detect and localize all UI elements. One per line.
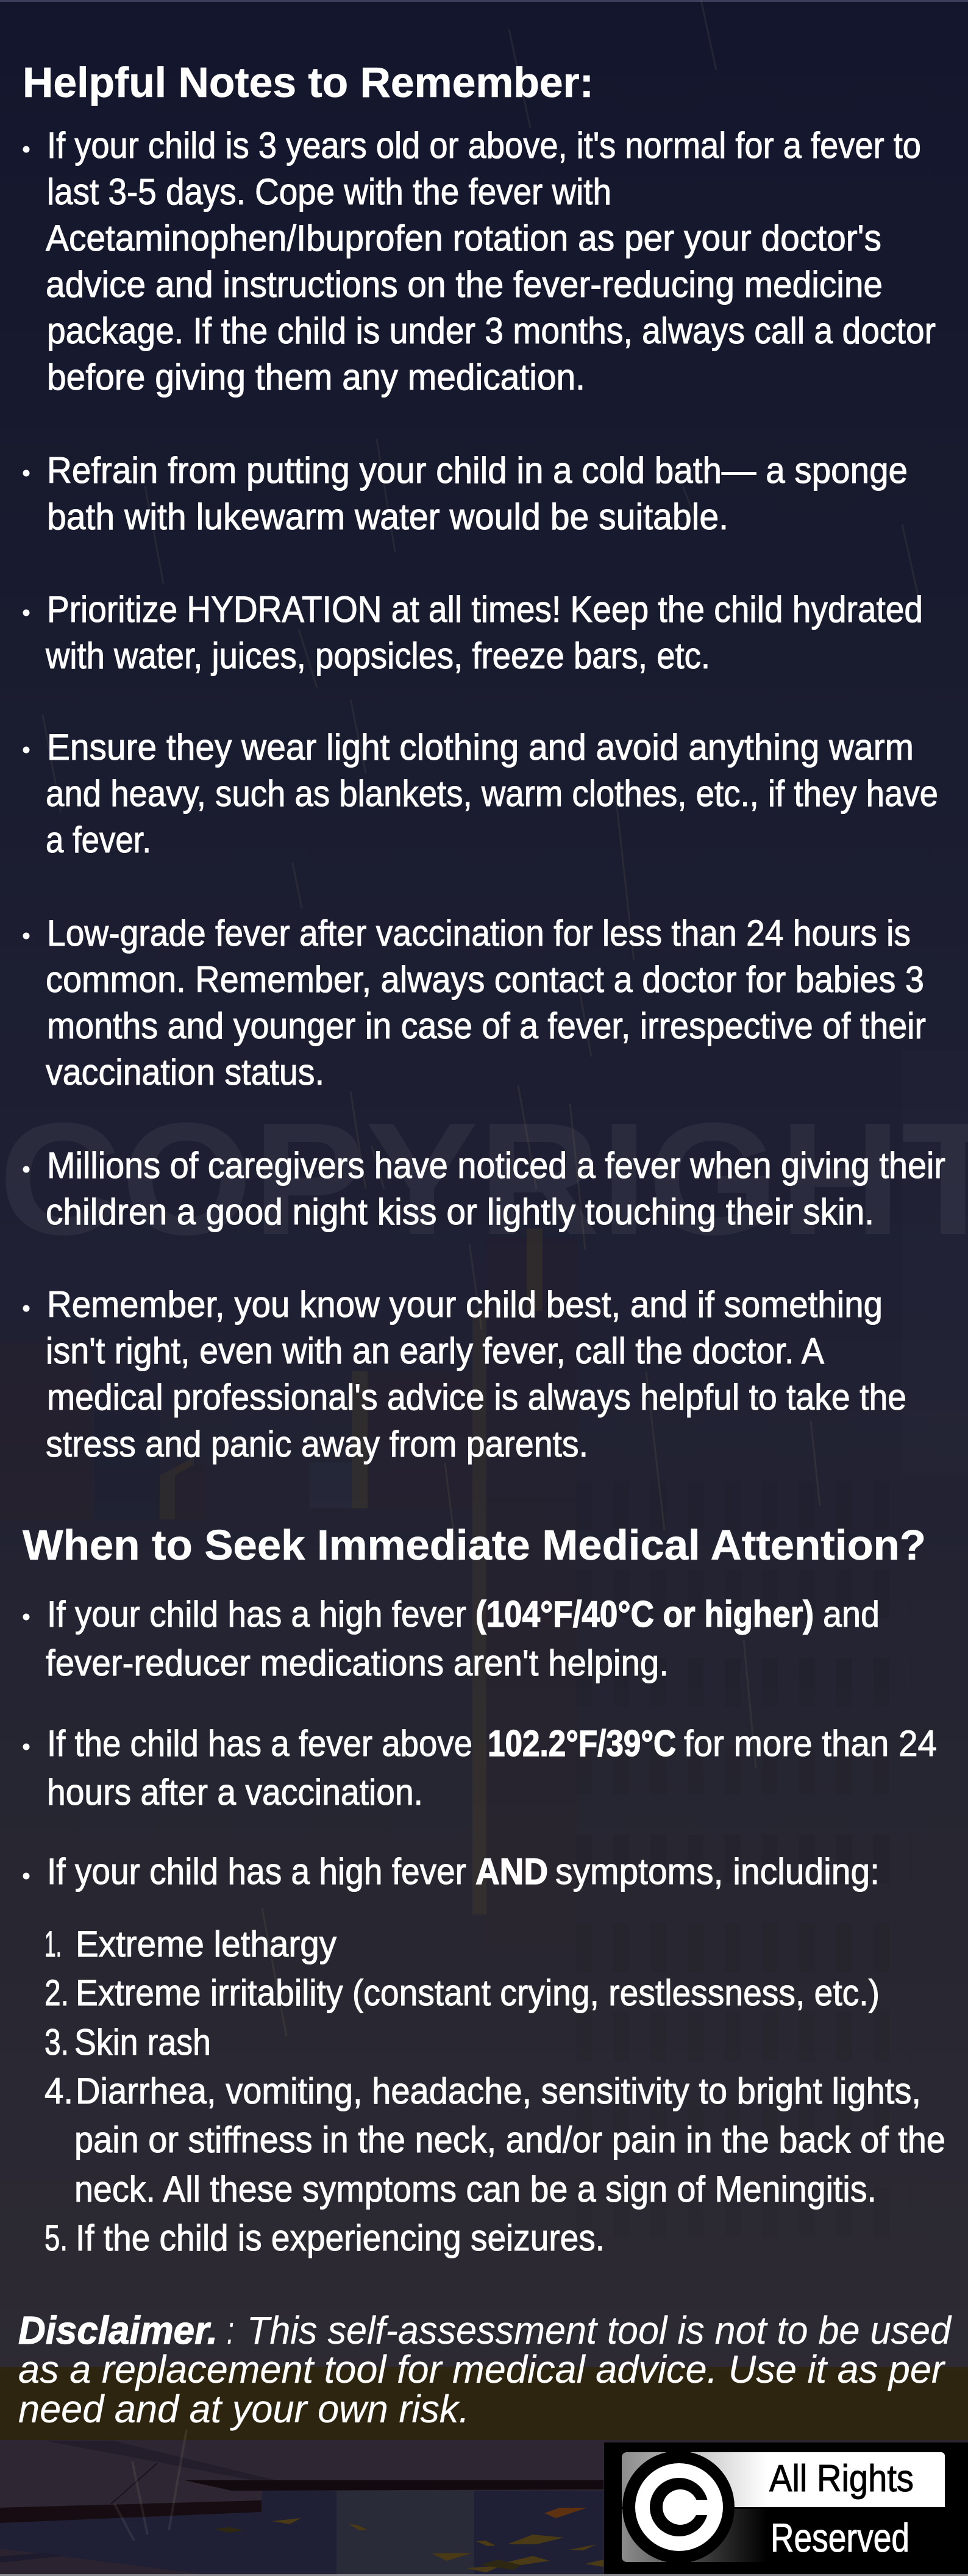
note: noticing fever: children a good night kiss or lightly touching their skin.	[46, 1191, 874, 1232]
note: you know your child best	[23, 1284, 906, 1465]
attention item: high fever not helped by medication: and	[823, 1594, 880, 1635]
badge: All Rights Reserved: Reserved	[770, 2515, 909, 2560]
note: light clothing: Ensure they wear light clothing and avoid anything warm	[47, 727, 914, 768]
attention item: high fever and symptoms: AND	[475, 1851, 548, 1892]
note: fever after vaccination: vaccination status.	[46, 1052, 324, 1093]
numbered symptom list: neck. All these symptoms can be a sign of Meningitis.	[74, 2169, 877, 2210]
note: fever duration and medication: Acetaminophen/Ibuprofen rotation as per your doctor's	[46, 218, 881, 259]
note: you know your child best: medical professional's advice is always helpful to take the	[47, 1377, 906, 1418]
note: fever after vaccination: months and younger in case of a fever, irrespective of their	[47, 1005, 926, 1046]
note: fever duration and medication: last 3-5 days. Cope with the fever with	[47, 171, 611, 212]
numbered symptom list: 4.	[44, 2071, 73, 2111]
numbered symptom list: Extreme irritability (constant crying, restlessness, etc.)	[76, 1972, 880, 2013]
note: sponge bath: Refrain from putting your child in a cold bath— a sponge	[47, 450, 908, 491]
note: light clothing: a fever.	[46, 819, 151, 860]
note: light clothing	[23, 727, 938, 860]
numbered symptom list: Skin rash	[74, 2022, 211, 2063]
disclaimer	[18, 2308, 952, 2431]
note: you know your child best: Remember, you know your child best, and if something	[47, 1284, 883, 1325]
badge: All Rights Reserved	[604, 2442, 968, 2574]
heading: Helpful Notes to Remember: Helpful Notes to Remember:	[23, 59, 594, 106]
bottom edge strip	[0, 2574, 968, 2576]
watermark: COPYRIGHT: COPYRIGHT	[0, 1090, 968, 1268]
attention item: high fever not helped by medication	[23, 1594, 880, 1683]
note: you know your child best: isn't right, even with an early fever, call the doctor. A	[46, 1330, 824, 1371]
attention item: fever after a vaccination: 102.2°F/39°C	[488, 1723, 676, 1764]
note: fever duration and medication: before giving them any medication.	[47, 357, 585, 398]
note: fever after vaccination: Low-grade fever after vaccination for less than 24 hours is	[47, 913, 911, 954]
note: hydration	[23, 589, 923, 676]
note: sponge bath: bath with lukewarm water would be suitable.	[47, 496, 728, 537]
note: fever duration and medication: advice and instructions on the fever-reducing medicine	[46, 264, 883, 305]
note: fever after vaccination: common. Remember, always contact a doctor for babies 3	[46, 959, 924, 1000]
numbered symptom list	[44, 1924, 945, 2258]
numbered symptom list: 3.	[44, 2022, 69, 2063]
disclaimer: need and at your own risk.	[18, 2387, 469, 2431]
disclaimer: as a replacement tool for medical advice. Use it as per	[18, 2347, 946, 2391]
attention item: high fever not helped by medication: (104°F/40°C or higher)	[475, 1594, 814, 1635]
attention item: fever after a vaccination: for more than 24	[684, 1723, 937, 1764]
numbered symptom list: 5.	[44, 2217, 68, 2258]
numbered symptom list: If the child is experiencing seizures.	[76, 2217, 605, 2258]
numbered symptom list: Extreme lethargy	[76, 1924, 336, 1964]
disclaimer: This self-assessment tool is not to be used	[247, 2308, 952, 2352]
attention item: fever after a vaccination: hours after a vaccination.	[47, 1772, 423, 1813]
background scene: buildings	[0, 1049, 968, 2274]
note: noticing fever	[23, 1145, 945, 1232]
background scene: bottom floor and debris	[0, 2430, 968, 2576]
note: you know your child best: stress and panic away from parents.	[46, 1424, 588, 1465]
background scene: yellow band	[0, 2367, 968, 2440]
numbered symptom list: 2.	[44, 1972, 69, 2013]
attention item: high fever and symptoms: symptoms, including:	[555, 1851, 880, 1892]
attention item: high fever not helped by medication: fever-reducer medications aren't helping.	[46, 1643, 669, 1683]
numbered symptom list: 1.	[44, 1924, 62, 1964]
note: hydration: with water, juices, popsicles, freeze bars, etc.	[45, 635, 710, 676]
attention item: high fever and symptoms: If your child has a high fever	[47, 1851, 466, 1892]
badge: All Rights Reserved: All Rights	[769, 2458, 914, 2500]
attention item: fever after a vaccination: If the child has a fever above	[47, 1723, 472, 1764]
heading: When to Seek Immediate Medical Attention: When to Seek Immediate Medical Attention?	[23, 1521, 926, 1569]
icon: copyright symbol	[622, 2451, 735, 2563]
disclaimer: :	[227, 2308, 234, 2352]
attention item: high fever not helped by medication: If your child has a high fever	[47, 1594, 466, 1635]
disclaimer: Disclaimer.	[18, 2308, 218, 2352]
numbered symptom list: Diarrhea, vomiting, headache, sensitivity to bright lights,	[76, 2071, 921, 2111]
attention item: high fever and symptoms	[23, 1851, 880, 1892]
background scene: rain streaks	[43, 0, 920, 2036]
note: fever after vaccination	[23, 913, 926, 1093]
note: fever duration and medication	[23, 125, 936, 398]
attention item: fever after a vaccination	[23, 1723, 937, 1813]
note: sponge bath	[23, 450, 908, 537]
